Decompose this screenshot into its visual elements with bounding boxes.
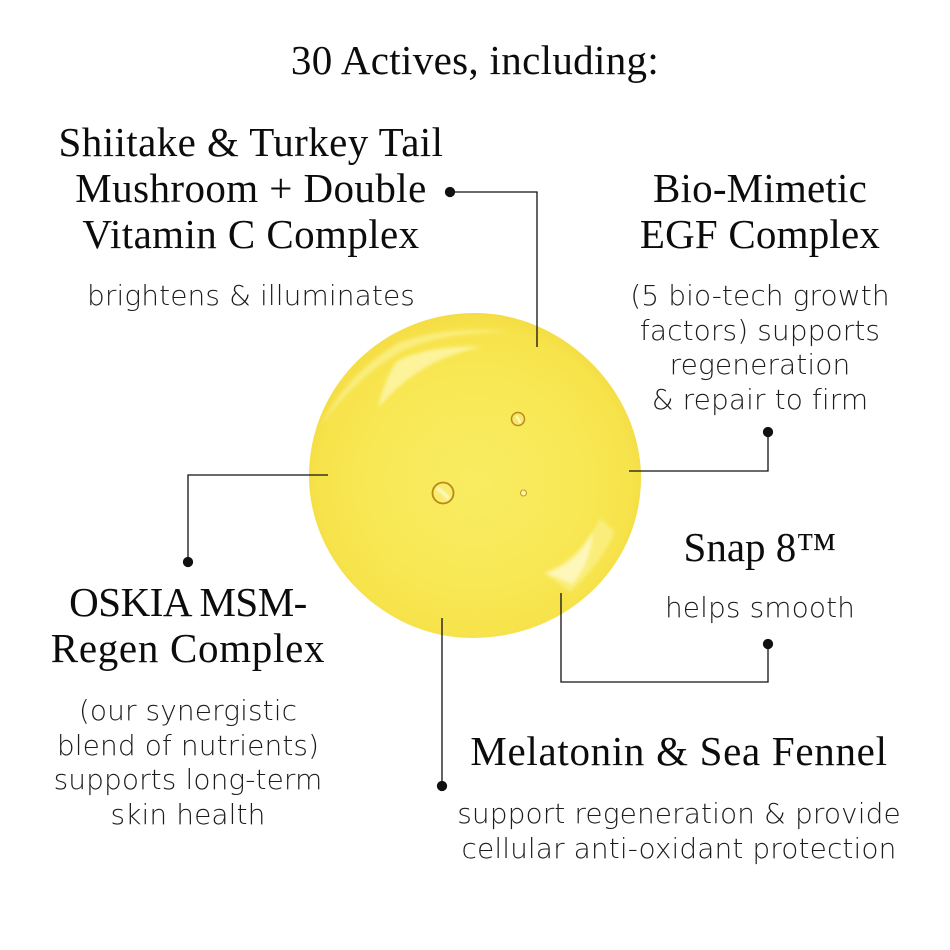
- text: synergistic: (our synergistic: [79, 694, 297, 727]
- oil drop: [309, 313, 641, 638]
- heading: Bio-Mimetic: Bio-Mimetic: [653, 165, 867, 211]
- heading: Shiitake: Mushroom + Double: [75, 165, 427, 211]
- heading: Shiitake: Shiitake & Turkey Tail: [59, 119, 443, 165]
- connector: Shiitake: [446, 188, 537, 347]
- heading: OSKIA: [51, 579, 325, 671]
- heading: Shiitake: [59, 119, 443, 257]
- text: melatonin description: [457, 797, 901, 864]
- text: synergistic: skin health: [111, 798, 265, 830]
- heading: Shiitake: Vitamin C Complex: [82, 211, 420, 257]
- text: synergistic: supports long-term: [54, 763, 322, 796]
- connector: Bio-Mimetic: [629, 428, 772, 471]
- text: bio-tech: [630, 279, 890, 416]
- text: melatonin description: support regeneration & provide: [457, 797, 901, 830]
- heading: OSKIA: Regen Complex: [51, 625, 325, 671]
- text: brightens: brightens & illuminates: [87, 279, 415, 312]
- heading: OSKIA: OSKIA MSM-: [69, 579, 307, 625]
- heading: Melatonin: Melatonin & Sea Fennel: [470, 728, 888, 774]
- heading: Bio-Mimetic: EGF Complex: [640, 211, 880, 257]
- bubble: medium: [512, 412, 524, 426]
- connector: Melatonin: [438, 618, 446, 790]
- text: bio-tech: & repair to firm: [652, 382, 868, 416]
- connector: Snap 8: [561, 593, 772, 682]
- text: bio-tech: factors) supports: [640, 314, 880, 346]
- text: melatonin description: cellular anti-oxidant protection: [462, 832, 896, 864]
- text: helps smooth: helps smooth: [665, 591, 855, 624]
- text: bio-tech: regeneration: [670, 348, 850, 381]
- heading: Bio-Mimetic: [640, 165, 880, 257]
- heading: Snap 8: Snap 8™: [684, 524, 836, 570]
- bubble: large: [432, 482, 454, 504]
- text: bio-tech: (5 bio-tech growth: [630, 279, 890, 312]
- connector: OSKIA: [184, 475, 328, 566]
- text: synergistic: [54, 694, 322, 830]
- text: synergistic: blend of nutrients): [57, 728, 319, 762]
- title: 30 Actives, including:: [291, 37, 659, 83]
- bubble: small: [520, 490, 526, 496]
